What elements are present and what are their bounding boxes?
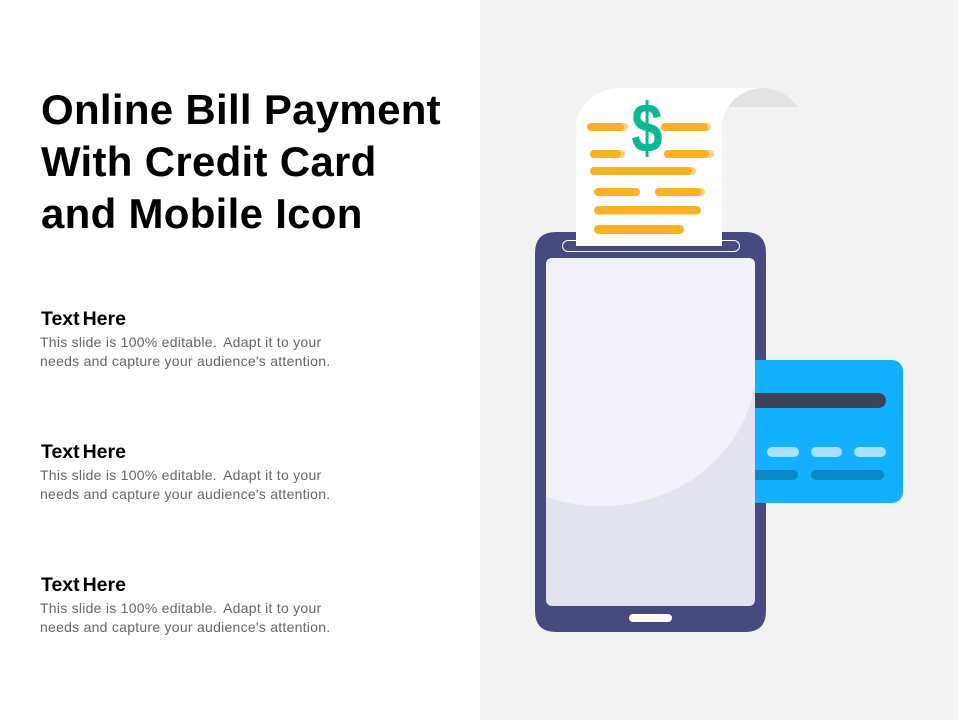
icon: smartphone (535, 232, 766, 632)
icon: dollar sign: $ (631, 90, 663, 167)
title: and Mobile Icon (41, 190, 363, 237)
right background panel (480, 0, 958, 720)
text block 1: This slide is 100% editable. Adapt it to your (40, 334, 321, 350)
illustration: phone, card and bill (535, 88, 903, 632)
text block 1: Text Here (41, 308, 126, 330)
text block 1: needs and capture your audience's attention. (40, 352, 330, 368)
title: With Credit Card (41, 138, 377, 185)
text block 3: Text Here (41, 574, 126, 596)
icon: paper bill (576, 88, 798, 246)
text block 2 (40, 441, 330, 502)
text block 1 (40, 308, 330, 369)
text block 3 (40, 574, 330, 635)
text block 2: This slide is 100% editable. Adapt it to your (40, 467, 321, 483)
text block 2: Text Here (41, 441, 126, 463)
title (41, 86, 441, 237)
text block 2: needs and capture your audience's attention. (40, 486, 330, 502)
title: Online Bill Payment (41, 86, 441, 133)
icon: credit card (740, 360, 903, 503)
text block 3: This slide is 100% editable. Adapt it to your (40, 600, 321, 616)
text block 3: needs and capture your audience's attention. (40, 618, 330, 634)
bill text lines (587, 123, 714, 234)
